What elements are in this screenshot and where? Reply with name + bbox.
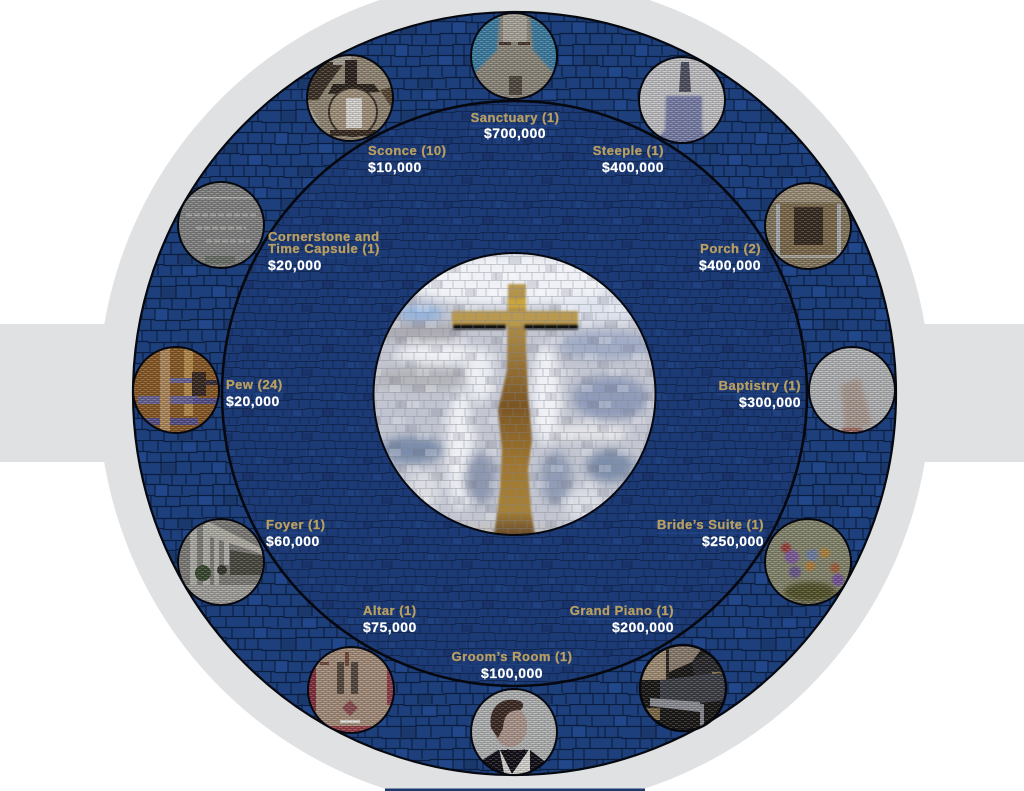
photo: cornerstone	[176, 181, 266, 271]
label: steeple	[592, 143, 664, 175]
label: bride's suite	[657, 517, 764, 549]
label: pew: Pew (24)	[226, 377, 283, 392]
photo: altar	[306, 646, 397, 736]
photo: baptistry	[808, 346, 898, 436]
label: porch: Porch (2)	[700, 241, 761, 256]
background side band: left	[0, 324, 120, 462]
label: sanctuary	[470, 110, 560, 141]
label: cornerstone and time capsule: Time Capsule (1)	[268, 241, 380, 256]
panel: outer mosaic ring	[133, 12, 896, 775]
label: cornerstone and time capsule	[268, 229, 381, 273]
label: sconce: Sconce (10)	[368, 143, 446, 158]
label: porch: $400,000	[699, 257, 761, 273]
photo: foyer	[176, 518, 266, 610]
label: foyer: Foyer (1)	[266, 517, 325, 532]
label: foyer: $60,000	[266, 533, 320, 549]
photo: sanctuary	[468, 12, 560, 102]
label: groom's room	[452, 649, 572, 681]
label: cornerstone and time capsule: $20,000	[268, 257, 322, 273]
label: grand piano: Grand Piano (1)	[570, 603, 674, 618]
label: cornerstone and time capsule: Cornerstone and	[268, 229, 380, 244]
label: foyer	[266, 517, 326, 549]
label: porch	[699, 241, 761, 273]
label: sanctuary: Sanctuary (1)	[471, 110, 559, 125]
label: groom's room: Groom’s Room (1)	[452, 649, 572, 664]
background side band: right	[904, 324, 1024, 462]
label: baptistry	[716, 378, 801, 410]
label: grand piano: $200,000	[612, 619, 674, 635]
label: steeple: Steeple (1)	[593, 143, 664, 158]
label: bride's suite: Bride’s Suite (1)	[657, 517, 764, 532]
photo: porch	[764, 182, 854, 272]
central image: golden cross in clouds	[370, 250, 660, 540]
photo: grand piano	[638, 644, 728, 734]
label: altar: $75,000	[363, 619, 417, 635]
label: pew	[226, 377, 284, 409]
label: altar	[363, 603, 418, 635]
label: steeple: $400,000	[602, 159, 664, 175]
label: groom's room: $100,000	[481, 665, 543, 681]
photo: sconce	[306, 54, 398, 144]
label: bride's suite: $250,000	[702, 533, 764, 549]
label: altar: Altar (1)	[363, 603, 417, 618]
label: baptistry: $300,000	[739, 394, 801, 410]
label: sconce: $10,000	[368, 159, 422, 175]
label: pew: $20,000	[226, 393, 280, 409]
photo: pew	[132, 346, 223, 436]
photo: bride's suite flowers	[764, 518, 854, 608]
label: sconce	[368, 143, 446, 175]
label: grand piano	[569, 603, 674, 635]
photo: steeple	[638, 56, 728, 146]
panel: inner mosaic disc	[222, 101, 807, 686]
navy base strip	[385, 788, 645, 791]
label: sanctuary: $700,000	[484, 125, 546, 141]
photo: groom	[470, 688, 560, 778]
label: baptistry: Baptistry (1)	[719, 378, 801, 393]
